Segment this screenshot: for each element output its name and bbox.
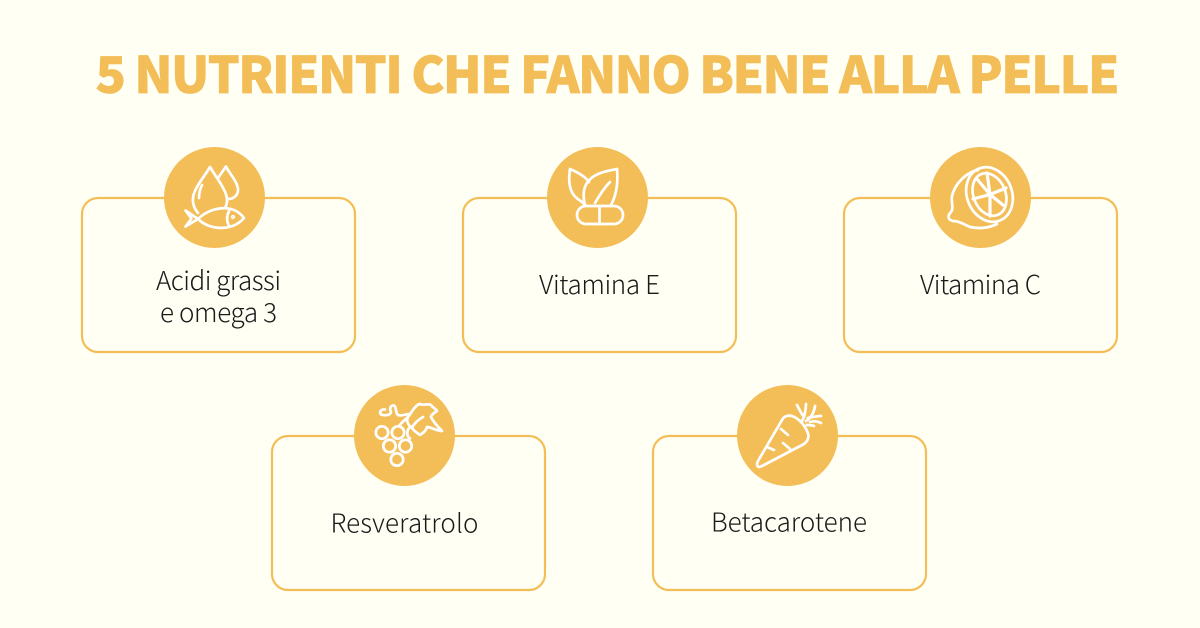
panel: betacarotene	[653, 385, 926, 590]
label: Betacarotene	[711, 502, 867, 540]
panel: acidi grassi e omega 3	[82, 147, 355, 352]
icon: grapes	[376, 404, 442, 466]
panel: vitamina E	[463, 147, 736, 352]
label: Resveratrolo	[330, 504, 478, 540]
icon: carrot	[757, 404, 821, 467]
icon: leaves and capsule	[569, 169, 623, 224]
label: Vitamina E	[539, 265, 660, 302]
panel: vitamina C	[844, 147, 1117, 352]
icon: drops and fish	[186, 166, 244, 228]
icon: lemon	[949, 160, 1021, 229]
label	[156, 261, 281, 330]
title: 5 NUTRIENTI CHE FANNO BENE ALLA PELLE	[96, 36, 1120, 108]
label: Vitamina C	[920, 265, 1041, 302]
label: Acidi grassi	[156, 261, 281, 298]
panel: resveratrolo	[272, 385, 545, 590]
label: e omega 3	[160, 293, 277, 330]
